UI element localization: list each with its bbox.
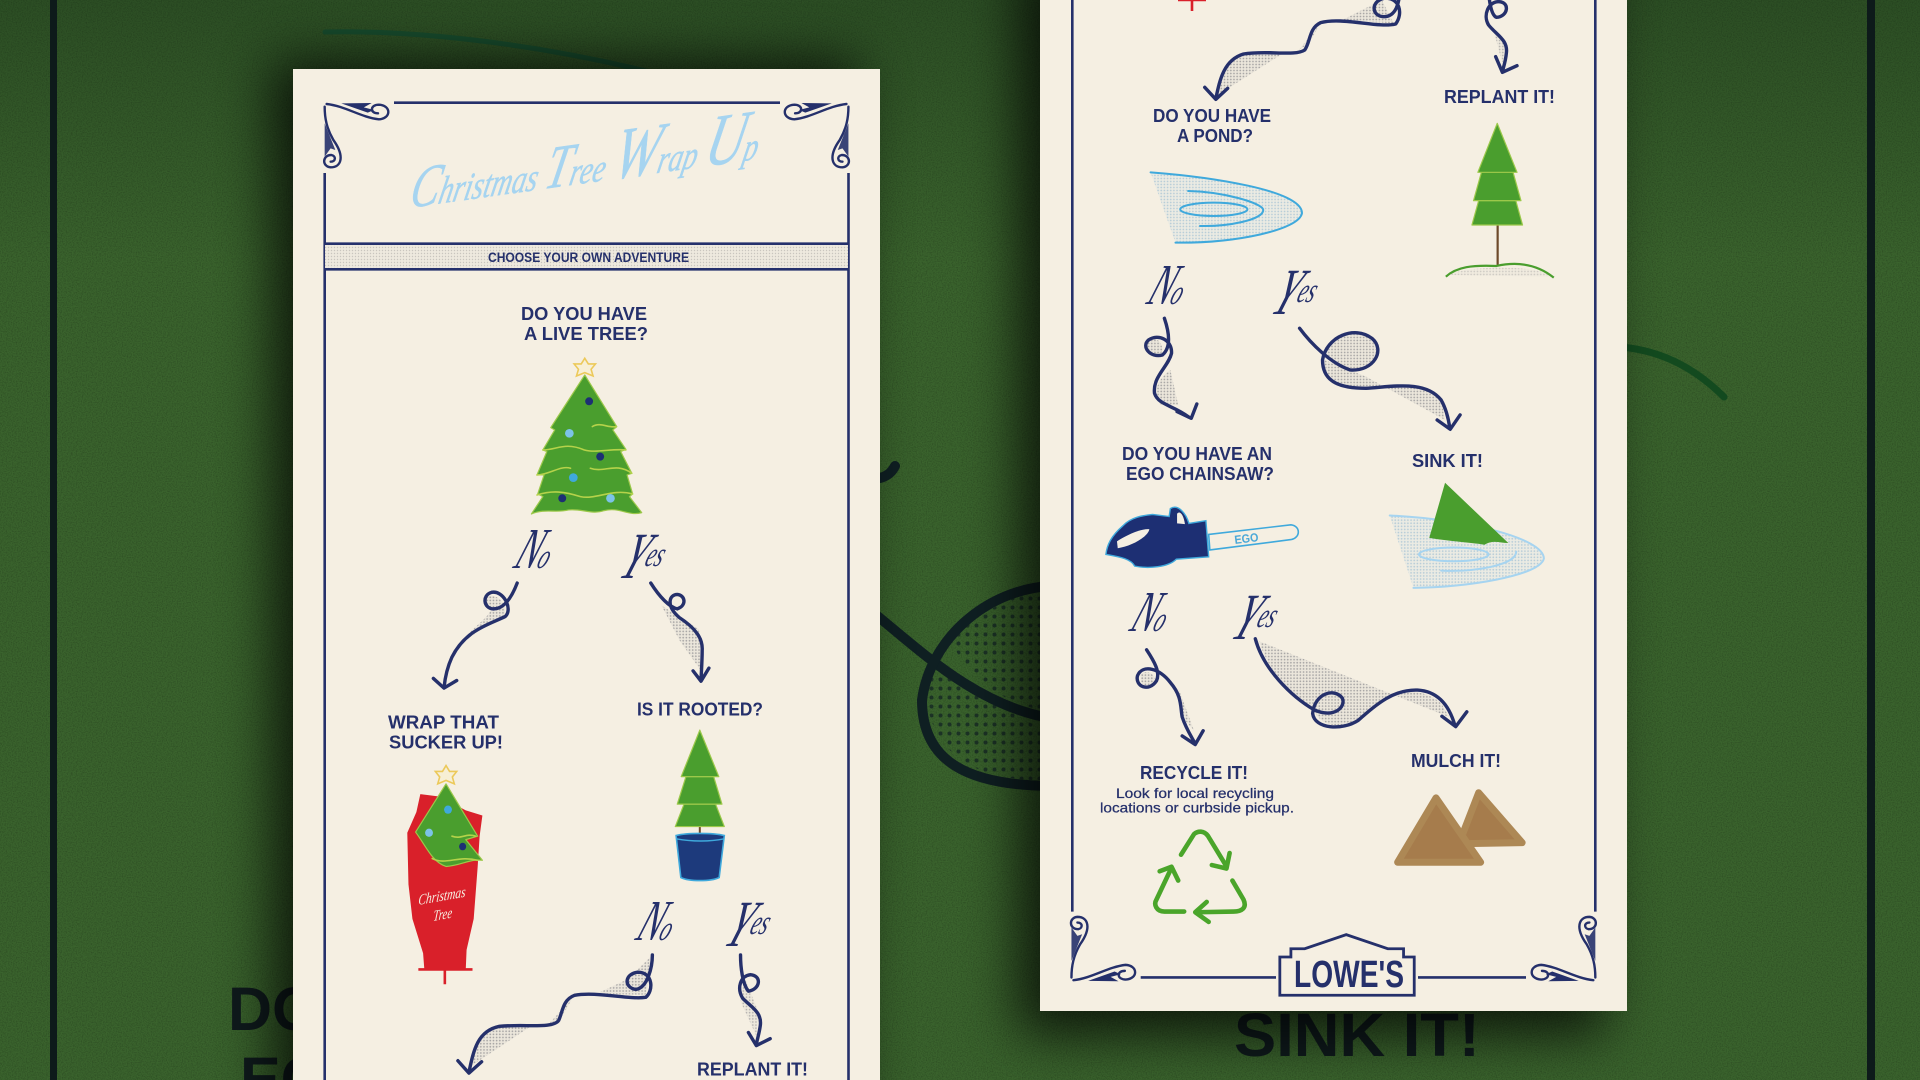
heading: sink it: SINK IT! (1412, 450, 1483, 471)
icon: pond (1151, 172, 1302, 243)
heading: do you have a live tree: A LIVE TREE? (524, 323, 648, 344)
heading: replant it, right sheet: REPLANT IT! (1444, 86, 1555, 107)
label: yes, rooted question: es (745, 903, 778, 942)
icon: recycle symbol (1155, 832, 1245, 922)
ornament: bottom right corner (1532, 917, 1596, 981)
panel: left sheet (293, 69, 880, 1080)
icon: bag stand stub at top (1178, 0, 1206, 11)
logo: lowes: LOWE'S (1294, 954, 1404, 996)
arrow: yes to mulch (1255, 639, 1467, 727)
background: enlarged partial question text (228, 975, 468, 1080)
background: enlarged partial question text: DO YOU (228, 975, 468, 1043)
subtitle: choose your own adventure: CHOOSE YOUR OWN ADVENTURE (488, 250, 689, 265)
frame: left sheet border (325, 103, 848, 1080)
ornament: top left corner (324, 103, 388, 167)
heading: do you have an ego chainsaw: EGO CHAINSAW? (1126, 463, 1274, 484)
background: enlarged arrow loop between panels (870, 466, 1050, 786)
icon: planted tree (1446, 123, 1554, 278)
arrow: yes to is it rooted (651, 583, 709, 681)
label: yes, first question: Y (611, 520, 665, 593)
arrow: no to pond (458, 955, 652, 1073)
label: no, first question: No (506, 516, 567, 581)
text on bag: christmas tree: Christmas (418, 883, 466, 909)
icon: mulch piles (1398, 793, 1522, 862)
label: yes, rooted question: Y (716, 888, 770, 961)
label: no, rooted question: No (628, 888, 689, 953)
heading: replant it, left sheet: REPLANT IT! (697, 1058, 808, 1080)
label: yes, chainsaw question: Y (1223, 581, 1277, 654)
icon: potted rooted tree (675, 730, 724, 881)
arrow: no to pond, continued (1205, 0, 1400, 99)
heading: wrap that sucker up: SUCKER UP! (389, 732, 503, 753)
panel: right sheet (1040, 0, 1627, 1011)
heading: recycle it with note: Look for local recycling (1116, 785, 1274, 801)
heading: do you have a live tree (521, 303, 648, 344)
background: enlarged green curve right (1620, 347, 1724, 397)
label: no, pond question: No (1139, 252, 1200, 317)
ornament: top right corner (785, 103, 849, 167)
heading: do you have a pond: A POND? (1177, 125, 1253, 146)
arrow: no to wrap (433, 583, 517, 688)
title: Christmas Tree Wrap Up (404, 94, 770, 225)
heading: recycle it with note: RECYCLE IT! (1140, 762, 1248, 783)
heading: wrap that sucker up: WRAP THAT (388, 712, 500, 733)
icon: ego chainsaw (1106, 507, 1298, 567)
heading: is it rooted: IS IT ROOTED? (637, 699, 763, 720)
arrow: yes to replant (740, 955, 770, 1046)
heading: recycle it with note: locations or curbside pickup. (1100, 800, 1294, 816)
label: yes, first question: es (640, 535, 673, 574)
text on bag: christmas tree: Tree (433, 904, 453, 925)
heading: recycle it with note (1100, 762, 1294, 816)
arrow: yes to sink it (1300, 328, 1460, 429)
background: enlarged sink it text: SINK IT! (1234, 1001, 1480, 1069)
icon: tree sinking in pond (1390, 483, 1544, 588)
arrow: no to chainsaw (1146, 318, 1197, 418)
heading: do you have a pond: DO YOU HAVE (1153, 105, 1271, 126)
icon: ego chainsaw: EGO (1234, 530, 1259, 547)
frame: right sheet border (1072, 0, 1595, 977)
background: enlarged green curve top left (325, 32, 650, 72)
heading: do you have an ego chainsaw (1122, 443, 1274, 484)
heading: do you have a pond (1153, 105, 1271, 146)
panel shadows (272, 0, 1605, 1080)
label: yes, chainsaw question: es (1252, 596, 1285, 635)
label: no, chainsaw question: No (1122, 579, 1183, 644)
icon: decorated christmas tree (531, 358, 642, 514)
arrow: yes to replant, continued (1486, 0, 1517, 72)
heading: do you have a live tree: DO YOU HAVE (521, 303, 647, 324)
icon: tree wrapped in red bag (407, 766, 482, 984)
label: yes, pond question: es (1292, 271, 1325, 310)
logo: lowes (1280, 935, 1414, 996)
text on bag: christmas tree (418, 883, 466, 925)
label: yes, pond question: Y (1263, 256, 1317, 329)
ornament: bottom left corner (1071, 917, 1135, 981)
heading: do you have an ego chainsaw: DO YOU HAVE AN (1122, 443, 1272, 464)
heading: wrap that sucker up (388, 712, 503, 753)
arrow: no to recycle (1137, 650, 1203, 745)
heading: mulch it: MULCH IT! (1411, 750, 1501, 771)
